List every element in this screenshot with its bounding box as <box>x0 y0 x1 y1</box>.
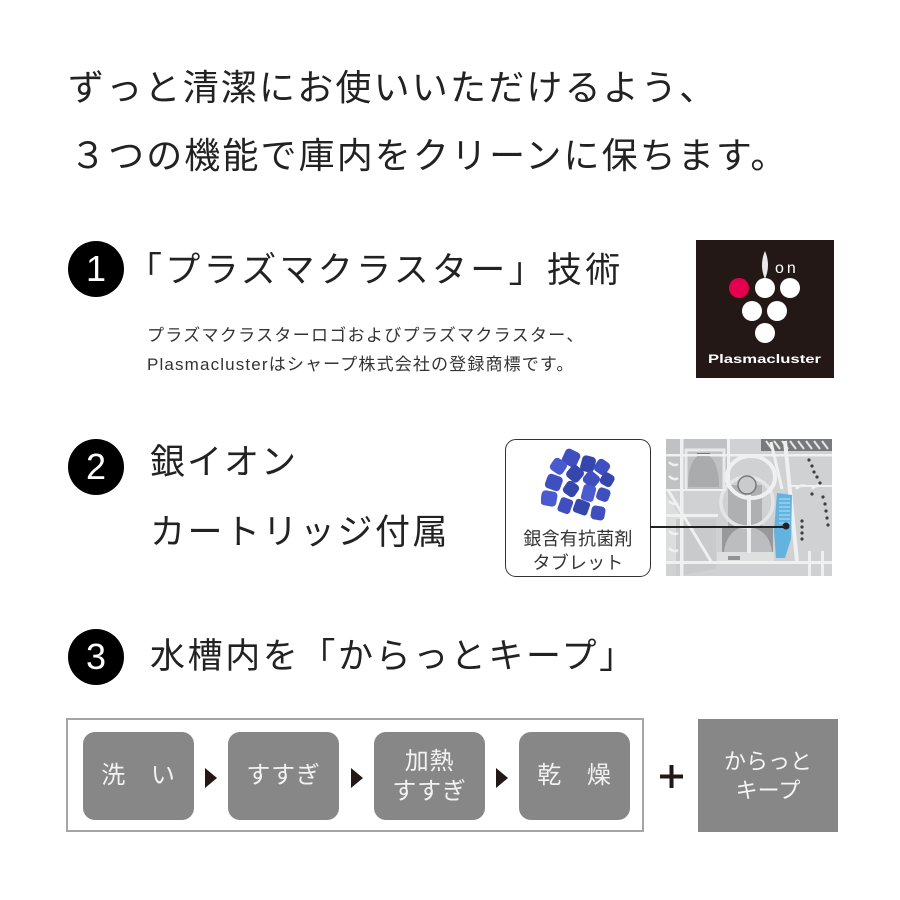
section 2 number badge: 2 <box>86 446 106 487</box>
icon: Plasmacluster Ion logo: Plasmacluster <box>708 352 821 366</box>
callout: tablet <box>505 439 651 577</box>
section 2 number badge <box>68 439 124 495</box>
heading line 1: 銀イオン <box>150 443 298 482</box>
step: rinse <box>228 732 339 820</box>
callout text <box>523 529 633 573</box>
cylinder and base <box>728 485 762 531</box>
icon: blue tablets <box>541 448 615 520</box>
arrow <box>205 768 217 788</box>
step: dry <box>519 732 630 820</box>
title line 1: ずっと清潔にお使いいただけるよう、 <box>68 67 717 108</box>
step: heated rinse: 加熱 <box>405 748 454 774</box>
section 1 number badge: 1 <box>86 248 106 289</box>
wash process panel <box>66 718 644 832</box>
step: rinse: すすぎ <box>246 762 321 789</box>
step: dry: 乾 燥 <box>537 762 612 789</box>
arrow <box>351 768 363 788</box>
photo: dishwasher rack with cartridge <box>666 439 832 576</box>
leader line <box>650 526 786 528</box>
arrow <box>496 768 508 788</box>
box: keep dry: キープ <box>736 778 800 802</box>
section 1 note: プラズマクラスターロゴおよびプラズマクラスター、 <box>147 326 585 345</box>
step: wash: 洗 い <box>101 762 176 789</box>
step: wash <box>83 732 194 820</box>
section 1 note <box>147 326 585 374</box>
section 2 heading <box>150 443 450 552</box>
arch opening <box>688 454 719 487</box>
blue cartridge <box>774 493 792 558</box>
section 3 number badge <box>68 629 124 685</box>
section 1 note: Plasmaclusterはシャープ株式会社の登録商標です。 <box>147 355 575 374</box>
icon: Plasmacluster Ion logo: on <box>775 260 799 277</box>
title line 2: ３つの機能で庫内をクリーンに保ちます。 <box>70 135 789 176</box>
panel frame <box>66 718 644 832</box>
icon: Plasmacluster Ion logo <box>696 240 834 378</box>
box: keep dry <box>698 719 838 832</box>
title <box>68 67 789 176</box>
section 3 number badge: 3 <box>86 636 106 677</box>
section 1 heading: 「プラズマクラスター」技術 <box>127 251 624 290</box>
callout text: 銀含有抗菌剤 <box>523 529 633 549</box>
heading line 2: カートリッジ付属 <box>150 513 450 552</box>
section 3 heading: 水槽内を「からっとキープ」 <box>150 637 637 676</box>
callout text: タブレット <box>532 553 624 573</box>
box: keep dry: からっと <box>724 748 812 774</box>
section 1 number badge <box>68 241 124 297</box>
rack wires <box>666 439 832 576</box>
icon: plus <box>660 765 683 788</box>
step: heated rinse: すすぎ <box>392 778 467 804</box>
step: heated rinse <box>374 732 485 820</box>
